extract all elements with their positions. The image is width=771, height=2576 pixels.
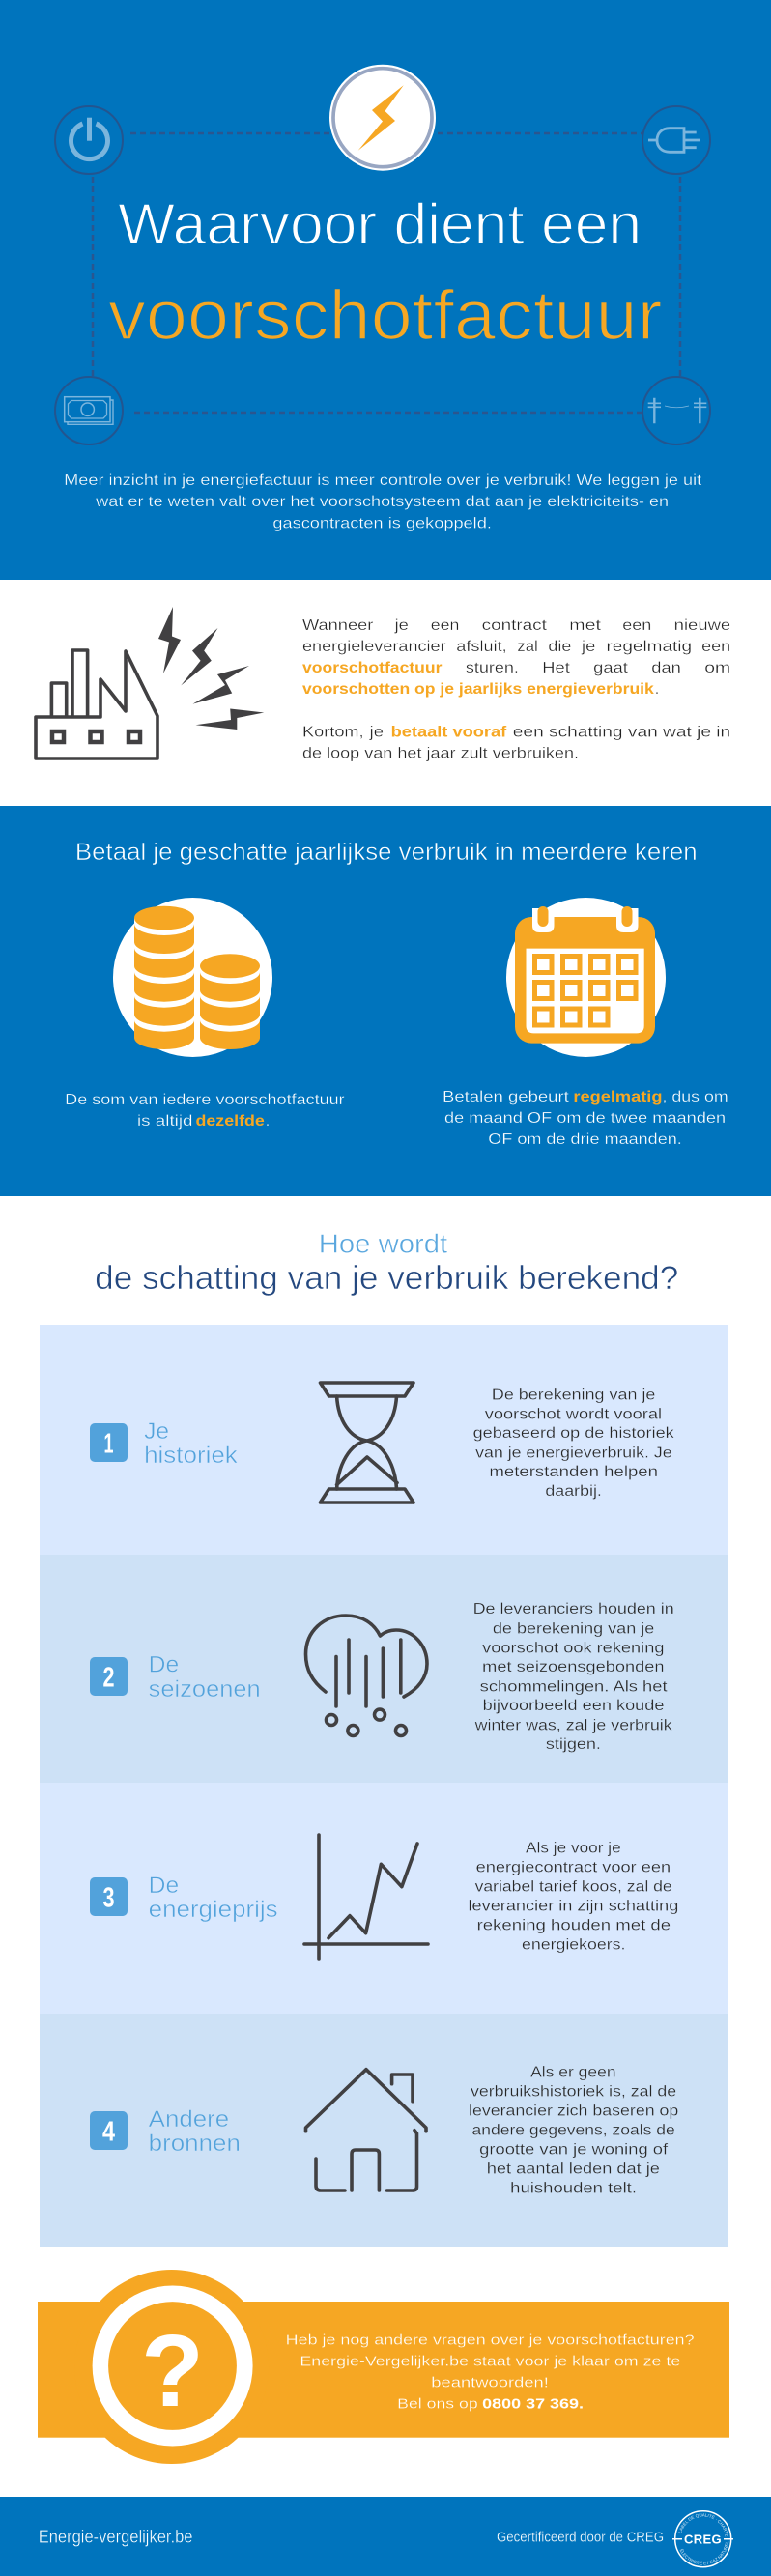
callout: questions	[38, 2270, 729, 2464]
caption: regular payment: , dus om	[663, 1089, 728, 1105]
text block: contract: regelmatig	[607, 639, 692, 655]
text block: contract: om	[704, 660, 730, 676]
heading: how is it calculated	[95, 1229, 678, 1297]
text block: contract: voorschotfactuur	[302, 660, 443, 676]
icon: coin stacks	[113, 898, 272, 1057]
description: bijvoorbeeld een koude	[483, 1698, 665, 1714]
description: leverancier in zijn schatting	[468, 1899, 678, 1915]
description: variabel tarief koos, zal de	[475, 1879, 672, 1896]
badge 4: 4	[102, 2116, 115, 2147]
heading: Betaal je geschatte jaarlijkse verbruik in meerdere keren	[75, 839, 698, 866]
caption: regular payment: regelmatig	[573, 1089, 663, 1105]
description: De berekening van je	[492, 1387, 655, 1403]
description: verbruikshistoriek is, zal de	[471, 2084, 676, 2101]
panel: step 2 seasons	[40, 1555, 728, 1783]
icon: power button	[55, 106, 123, 174]
text block: contract: Kortom,	[302, 725, 364, 740]
caption: same total: dezelfde	[195, 1113, 265, 1130]
footer site name: Energie-vergelijker.be	[39, 2528, 193, 2547]
text block: contract: een schatting van wat je in	[513, 725, 730, 740]
icon: cloud with rain	[305, 1616, 427, 1735]
description: voorschot ook rekening	[482, 1641, 665, 1656]
icon: CREG seal	[672, 2510, 733, 2568]
icon: CREG seal: LABEL DE QUALITÉ · CHARTE	[678, 2513, 728, 2537]
caption: same total: De som van iedere voorschotfactuur	[65, 1092, 345, 1108]
icon: calendar	[506, 898, 666, 1057]
description: gebaseerd op de historiek	[473, 1425, 674, 1442]
description: energiecontract voor een	[476, 1860, 671, 1876]
badge 2	[90, 1657, 128, 1696]
text block: contract: je	[393, 617, 409, 634]
intro text: wat er te weten valt over het voorschotsysteem dat aan je elektriciteits- en	[95, 494, 669, 510]
icon: CREG seal: CREG	[684, 2532, 722, 2547]
panel: payment in instalments	[0, 806, 771, 1196]
caption: regular payment: OF om de drie maanden.	[488, 1131, 682, 1148]
label: de energieprijs	[149, 1873, 278, 1923]
callout text: 0800 37 369.	[482, 2396, 584, 2413]
text block: contract: dan	[651, 660, 681, 676]
description: andere gegevens, zoals de	[471, 2123, 675, 2139]
description: met seizoensgebonden	[482, 1659, 665, 1675]
description	[468, 1841, 678, 1954]
icon: banknotes	[55, 377, 123, 444]
caption: regular payment	[443, 1089, 728, 1148]
icon: hourglass	[321, 1383, 414, 1503]
description: daarbij.	[545, 1483, 602, 1500]
description: meterstanden helpen	[489, 1464, 658, 1480]
text block: contract: Het	[542, 660, 570, 676]
description: Als je voor je	[526, 1841, 621, 1857]
text block: contract: sturen.	[466, 660, 519, 676]
text block: contract: een	[701, 639, 730, 655]
description: het aantal leden dat je	[487, 2161, 660, 2178]
label: je historiek: Je	[144, 1418, 169, 1445]
description: van je energieverbruik. Je	[475, 1445, 672, 1461]
callout text	[286, 2333, 695, 2413]
intro text	[64, 472, 702, 531]
callout text: Bel ons op	[397, 2396, 478, 2413]
panel: step 1 history	[40, 1325, 728, 1555]
description: Als er geen	[530, 2065, 616, 2081]
text block: contract	[302, 617, 730, 761]
description: stijgen.	[546, 1736, 601, 1753]
caption: same total: .	[266, 1113, 270, 1130]
text block: contract: de loop van het jaar zult verbruiken.	[302, 746, 579, 761]
badge 4	[90, 2111, 128, 2150]
description: voorschot wordt vooral	[485, 1407, 662, 1422]
label: andere bronnen: Andere	[149, 2106, 229, 2132]
panel: contract explanation	[36, 607, 730, 761]
badge 1	[90, 1423, 128, 1462]
badge 1: 1	[104, 1428, 114, 1459]
callout text: Energie-Vergelijker.be staat voor je klaar om ze te	[300, 2354, 680, 2370]
text block: contract: afsluit,	[456, 639, 507, 655]
text block: contract: je	[581, 639, 595, 655]
heading: how is it calculated: Hoe wordt	[319, 1229, 447, 1258]
badge 3: 3	[102, 1882, 114, 1913]
icon: line chart	[304, 1835, 428, 1959]
title: Waarvoor dient een	[118, 192, 642, 257]
text block: contract: een	[431, 617, 459, 634]
text block: contract: een	[622, 617, 651, 634]
description: rekening houden met de	[477, 1918, 671, 1934]
intro text: gascontracten is gekoppeld.	[272, 516, 492, 531]
caption: same total: is altijd	[137, 1113, 193, 1130]
text block: contract: die	[548, 639, 571, 655]
text block: contract: Wanneer	[302, 617, 374, 634]
description: de berekening van je	[493, 1620, 654, 1637]
title: voorschotfactuur	[108, 277, 663, 355]
label: andere bronnen	[149, 2106, 241, 2157]
caption: regular payment: de maand OF om de twee maanden	[444, 1110, 726, 1127]
icon: lightning bolt badge	[329, 65, 436, 171]
description	[473, 1387, 674, 1500]
callout text: Heb je nog andere vragen over je voorschotfacturen?	[286, 2333, 695, 2349]
badge 2: 2	[102, 1662, 114, 1693]
description: grootte van je woning of	[479, 2142, 669, 2159]
label: je historiek: historiek	[144, 1443, 239, 1469]
text block: contract: nieuwe	[674, 617, 730, 634]
label: de seizoenen: seizoenen	[149, 1676, 261, 1703]
heading: how is it calculated: de schatting van je verbruik berekend?	[95, 1260, 678, 1297]
icon: CREG seal: ÉLECTRICITÉ ET GAZ NATUREL	[680, 2541, 728, 2564]
label: je historiek	[144, 1418, 239, 1469]
caption: regular payment: Betalen gebeurt	[443, 1089, 569, 1105]
label: andere bronnen: bronnen	[149, 2131, 241, 2157]
text block: contract: betaalt vooraf	[391, 725, 507, 740]
text block: contract: zal	[517, 639, 538, 655]
icon: plug	[642, 106, 710, 174]
panel: step 4 other sources	[40, 2014, 728, 2247]
icon: house	[305, 2070, 426, 2190]
text block: contract: gaat	[593, 660, 629, 676]
certification text: Gecertificeerd door de CREG	[497, 2531, 664, 2546]
label: de energieprijs: De	[149, 1873, 179, 1899]
text block: contract: energieleverancier	[302, 639, 446, 655]
text block: contract: met	[569, 617, 602, 634]
text block: contract: voorschotten op je jaarlijks energieverbruik	[302, 681, 654, 698]
text block: contract: contract	[482, 617, 548, 634]
description: huishouden telt.	[510, 2181, 637, 2197]
description: energiekoers.	[522, 1937, 625, 1954]
description	[469, 2065, 678, 2197]
callout text: beantwoorden!	[431, 2375, 549, 2391]
description	[473, 1601, 674, 1753]
description: leverancier zich baseren op	[469, 2104, 678, 2120]
panel: header	[0, 0, 771, 580]
description: winter was, zal je verbruik	[473, 1717, 672, 1733]
icon: power lines	[642, 377, 710, 444]
description: schommelingen. Als het	[480, 1679, 668, 1695]
label: de seizoenen: De	[149, 1652, 179, 1678]
caption: same total	[65, 1092, 345, 1130]
badge 3	[90, 1877, 128, 1916]
label: de seizoenen	[149, 1652, 261, 1703]
icon: question mark: ?	[141, 2314, 204, 2428]
panel: step 3 energy price	[40, 1783, 728, 2014]
label: de energieprijs: energieprijs	[149, 1897, 278, 1923]
intro text: Meer inzicht in je energiefactuur is meer controle over je verbruik! We leggen je uit	[64, 472, 702, 489]
footer	[0, 2497, 771, 2576]
icon: factory with lightning	[36, 607, 264, 758]
text block: contract: .	[655, 681, 659, 698]
text block: contract: je	[369, 725, 384, 740]
description: De leveranciers houden in	[473, 1601, 674, 1617]
title	[108, 192, 663, 355]
icon: question mark	[74, 2270, 269, 2464]
